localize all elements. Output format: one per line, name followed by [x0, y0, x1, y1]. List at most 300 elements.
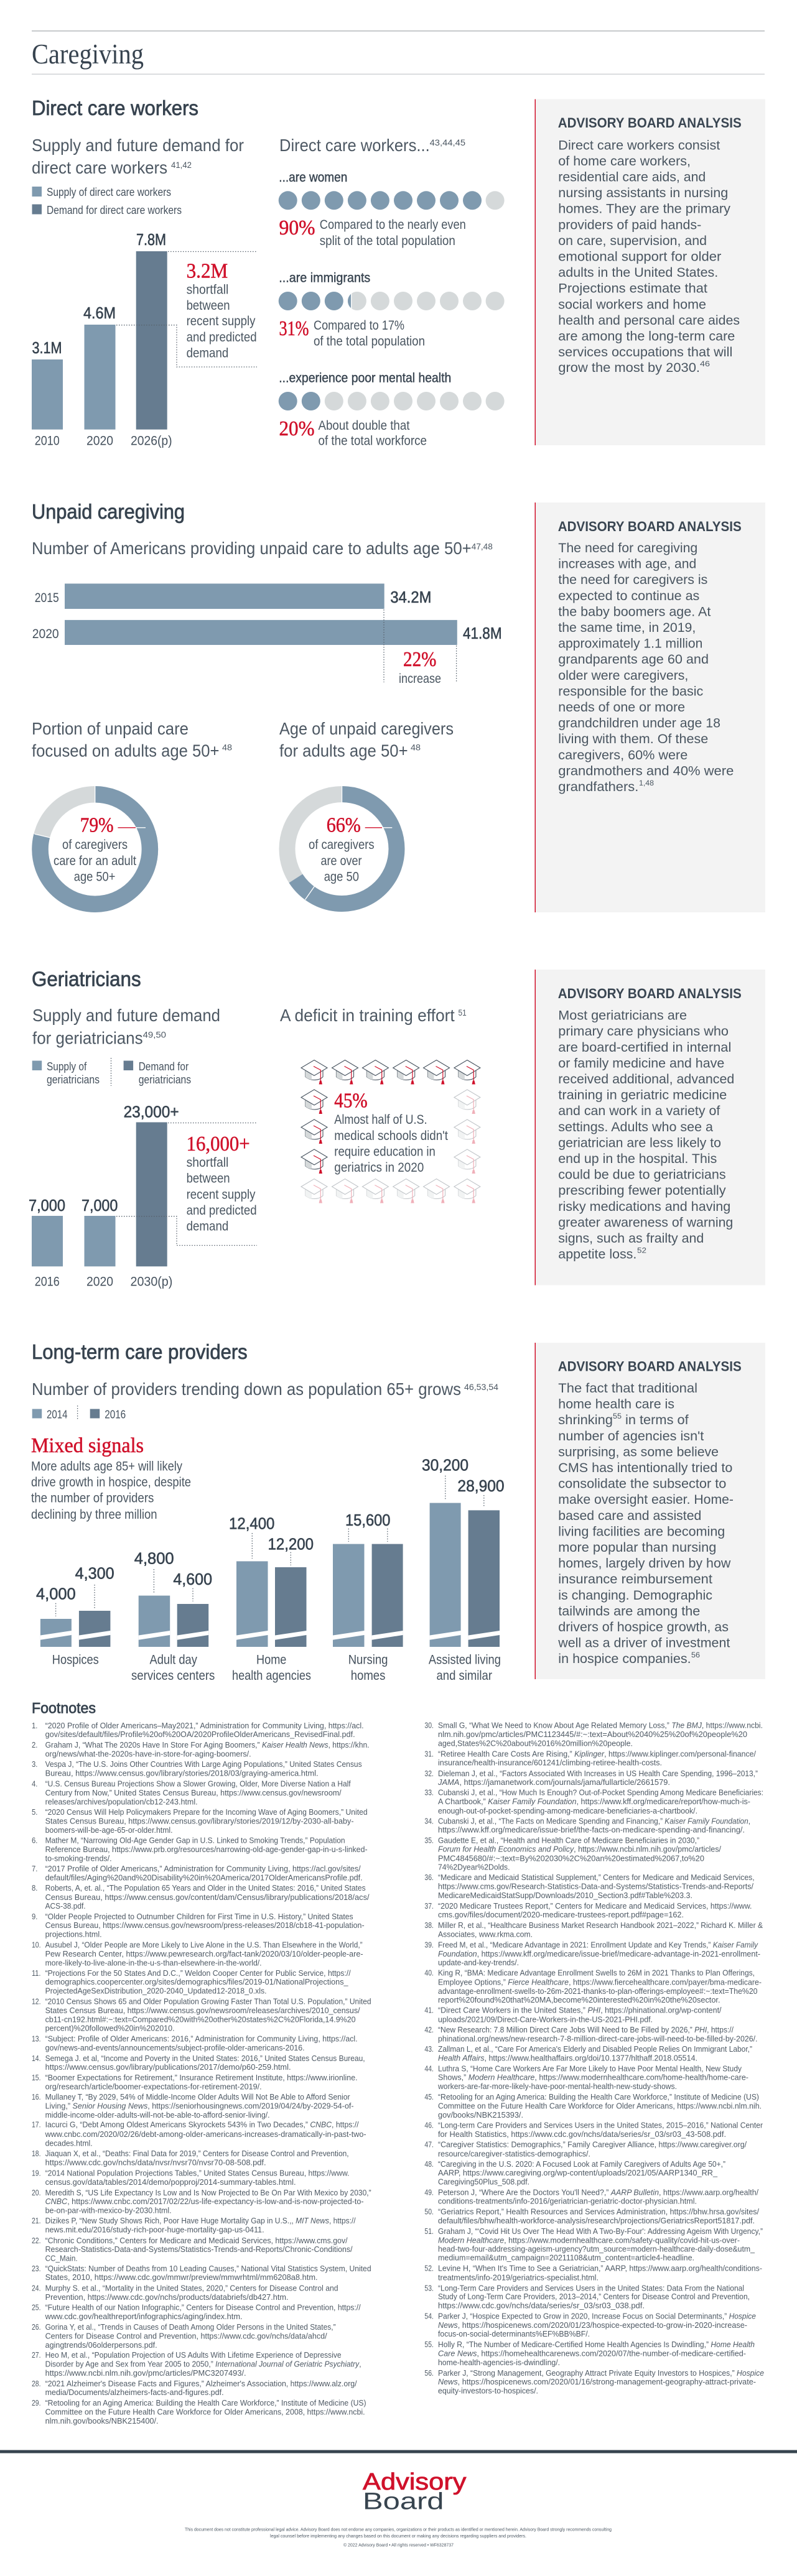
footnotes: right column 30 to 56: for Health Statistics, https://www.cdc.gov/nchs/data/series/sr_03/sr03_43-508.pdf. — [438, 2130, 726, 2139]
footnotes: left column 1 to 29: Census Bureau, https://www.census.gov/newsroom/press-releases/2018/cb18-41-population- — [45, 1921, 365, 1930]
bars: hospices: Hospices — [52, 1652, 99, 1667]
stat: are women — [279, 170, 505, 248]
bars: nursing homes — [333, 1511, 403, 1683]
footnotes: left column 1 to 29: “2014 National Population Projections Tables,” United States Census Bureau, https://www. — [45, 2169, 350, 2178]
section: direct care workers — [32, 96, 505, 448]
footnotes: right column 30 to 56: report%20found%20that%20MA,become%20interested%20in%20the%20sector. — [438, 1996, 720, 2004]
footnotes: right column 30 to 56: JAMA, https://jamanetwork.com/journals/jama/fullarticle/2661579. — [437, 1778, 670, 1787]
panel: advisory board analysis, geriatricians: or family medicine and have — [558, 1056, 724, 1070]
panel: advisory board analysis, direct care workers: on care, supervision, and — [558, 234, 707, 248]
footnotes: right column 30 to 56: Foundation, https://www.kff.org/medicare/issue-brief/medicare-advantage-in-2021-enrollment- — [438, 1950, 760, 1958]
footnotes: left column 1 to 29: www.cnbc.com/2020/02/26/debt-among-older-americans-increases-dramatically-in-past-two- — [45, 2130, 366, 2139]
stat: are women: ...are women — [279, 170, 347, 185]
footnotes: right column 30 to 56: nlm.nih.gov/pmc/articles/PMC1123445/#:~:text=About%2040%25%20of%20people%20 — [438, 1730, 747, 1739]
footnotes: left column 1 to 29: 20. — [32, 2189, 41, 2197]
panel: advisory board analysis, long-term care providers: homes, largely driven by how — [558, 1557, 731, 1571]
bar chart: unpaid caregivers 2015 vs 2020 — [32, 583, 502, 686]
footnotes: left column 1 to 29: 2. — [32, 1741, 37, 1749]
bar chart: direct care workers supply vs demand: 3.1M — [32, 338, 62, 357]
footnotes: left column 1 to 29: States, 2010, https://www.cdc.gov/mmwr/preview/mmwrhtml/mm6208a8.htm. — [45, 2273, 318, 2282]
logo: Advisory Board: Board — [363, 2489, 444, 2515]
footnotes: left column 1 to 29: 3. — [32, 1760, 37, 1769]
footnotes: right column 30 to 56: 43. — [424, 2045, 434, 2054]
legend: 2014 and 2016 — [32, 1406, 126, 1421]
chart title: supply and future demand for geriatricians — [32, 1006, 220, 1048]
callout: 3.2M shortfall: shortfall — [187, 282, 228, 297]
footnotes: right column 30 to 56: “Retiree Health Care Costs Are Rising,” Kiplinger, https://www.kiplinger.com/personal-finance/ — [438, 1749, 757, 1758]
panel: advisory board analysis, long-term care providers: well as a driver of investment — [557, 1636, 730, 1651]
callout: 3.2M shortfall: 3.2M — [187, 259, 228, 282]
footnotes: left column 1 to 29: “Older People Projected to Outnumber Children for First Time in U.S. History,” United States — [45, 1912, 353, 1921]
bar chart: geriatricians supply vs demand: 7,000 — [82, 1196, 118, 1215]
footer legal text: © 2022 Advisory Board • All rights reserved • WF6328737 — [343, 2542, 454, 2547]
footnotes: left column 1 to 29: 12. — [32, 1998, 41, 2006]
footnotes: right column 30 to 56: cms.gov/files/document/2020-medicare-trustees-report.pdf#page=162. — [438, 1911, 684, 1919]
bar chart: geriatricians supply vs demand: 23,000+ — [124, 1102, 179, 1121]
footnotes: left column 1 to 29: releases/archives/population/cb12-243.html. — [45, 1797, 198, 1806]
chart title: supply and future demand: direct care workers — [32, 158, 167, 177]
footnotes: right column 30 to 56: 56. — [424, 2369, 434, 2378]
footnotes: left column 1 to 29: Vespa J, “The U.S. Joins Other Countries With Large Aging Populations,” United States Census — [45, 1760, 362, 1769]
stat: 45 percent of medical schools: 45% — [334, 1090, 368, 1113]
footnotes: left column 1 to 29: CNBC, https://www.cnbc.com/2017/02/22/us-life-expectancy-is-low-and-is-now-projected-to- — [45, 2197, 364, 2206]
callout: mixed signals: drive growth in hospice, despite — [31, 1475, 191, 1490]
footnotes: right column 30 to 56: phinational.org/news/new-research-7-8-million-direct-care-jobs-will-need-to-be-filled-by-2026/. — [438, 2034, 758, 2043]
footnotes: left column 1 to 29: 11. — [32, 1969, 41, 1978]
panel: advisory board analysis, direct care workers: of home care workers, — [558, 154, 691, 169]
footnotes: right column 30 to 56: 31. — [424, 1749, 434, 1758]
panel: advisory board analysis, geriatricians: risky medications and having — [558, 1200, 730, 1214]
panel: advisory board analysis, unpaid caregiving: older were caregivers, — [558, 669, 688, 683]
panel: advisory board analysis, long-term care providers: The fact that traditional — [558, 1381, 697, 1396]
footnotes: right column 30 to 56: “Caregiving in the U.S. 2020: A Focused Look at Family Caregivers of Adults Age 50+,” — [438, 2160, 725, 2169]
footer legal text — [185, 2526, 612, 2547]
footnotes: left column 1 to 29: 7. — [32, 1865, 37, 1873]
footnotes: left column 1 to 29: Living,” Senior Housing News, https://seniorhousingnews.com/2019/04/24/by-2029-54-of- — [45, 2102, 354, 2111]
footnotes: right column 30 to 56: 47. — [424, 2141, 434, 2149]
panel: advisory board analysis, direct care workers: Direct care workers consist — [558, 138, 720, 152]
footnotes: left column 1 to 29: Bureau, https://www.census.gov/library/stories/2018/03/graying-america.html. — [45, 1769, 319, 1777]
footnotes: left column 1 to 29: “U.S. Census Bureau Projections Show a Slower Growing, Older, More Diverse Nation a Half — [45, 1780, 351, 1789]
panel: advisory board analysis, unpaid caregiving: increases with age, and — [558, 557, 696, 572]
panel: advisory board analysis, long-term care providers — [535, 1343, 765, 1679]
panel: advisory board analysis, direct care workers: Projections estimate that — [558, 282, 707, 296]
footnotes: left column 1 to 29: 28. — [32, 2379, 41, 2388]
panel: advisory board analysis, long-term care providers: 56 — [691, 1651, 700, 1659]
panel: advisory board analysis, geriatricians: settings. Adults who see a — [558, 1120, 713, 1134]
bars: nursing homes: Nursing — [348, 1652, 388, 1667]
panel: advisory board analysis, unpaid caregiving: approximately 1.1 million — [558, 637, 702, 651]
bars: home health agencies — [229, 1514, 314, 1683]
bars: nursing homes: homes — [351, 1669, 385, 1683]
footnotes: right column 30 to 56: resource/caregiver-statistics-demographics/. — [438, 2149, 590, 2158]
footnotes: left column 1 to 29: agingtrends/06olderpersons.pdf. — [45, 2341, 157, 2350]
panel: advisory board analysis, long-term care providers: tailwinds are among the — [558, 1604, 700, 1618]
footnotes: left column 1 to 29: States Census Bureau, https://www.census.gov/newsroom/releases/archives/2010_census/ — [45, 2006, 360, 2015]
footnotes: left column 1 to 29: “Future Health of our Nation Infographic,” Centers for Disease Control and Prevention, https:// — [45, 2304, 361, 2312]
footnotes: right column 30 to 56: Cubanski J, et al., “The Facts on Medicare Spending and Financing,” Kaiser Family Foundation, — [438, 1817, 750, 1825]
footnotes: right column 30 to 56: medium=email&utm_campaign=20211108&utm_content=article4-headline. — [438, 2254, 694, 2263]
panel: advisory board analysis, long-term care providers: home health care is — [558, 1397, 674, 1412]
callout: 3.2M shortfall — [187, 259, 257, 361]
footnotes: right column 30 to 56: focus-on-social-determinants%EF%BB%BF/. — [438, 2330, 590, 2338]
stat: 45 percent of medical schools: medical schools didn't — [334, 1129, 448, 1143]
footnotes: right column 30 to 56: insurance/health-insurance/601241/climbing-retiree-health-costs. — [438, 1759, 662, 1768]
panel: advisory board analysis, long-term care providers: insurance reimbursement — [558, 1572, 712, 1587]
footnotes: left column 1 to 29: news.mit.edu/2016/study-rich-poor-huge-mortality-gap-us-0411. — [45, 2226, 264, 2235]
donut chart: 79 percent: 79% — [80, 813, 114, 837]
footnotes: left column 1 to 29: census.gov/data/tables/2014/demo/popproj/2014-summary-tables.html. — [45, 2178, 296, 2187]
panel: advisory board analysis, geriatricians: prescribing fewer potentially — [558, 1184, 726, 1198]
panel: advisory board analysis, geriatricians: appetite loss. — [558, 1248, 636, 1262]
panel: advisory board analysis, long-term care providers: make oversight easier. Home- — [558, 1493, 734, 1507]
footnotes: right column 30 to 56: Associates, www.rkma.com. — [438, 1930, 533, 1939]
bar chart: geriatricians supply vs demand — [29, 1102, 257, 1289]
panel: advisory board analysis, geriatricians: signs, such as frailty and — [558, 1231, 704, 1246]
footnotes: left column 1 to 29: Research-Statistics-Data-and-Systems/Statistics-Trends-and-Reports/Chronic-Conditions/ — [45, 2245, 353, 2254]
callout: 3.2M shortfall: recent supply — [187, 314, 256, 328]
stat: 45 percent of medical schools: require education in — [334, 1145, 436, 1159]
footnotes: left column 1 to 29: Reference Bureau, https://www.prb.org/resources/narrowing-old-age-gender-gap-in-u-s-linked- — [45, 1845, 368, 1854]
callout: 16,000+ shortfall: 16,000+ — [187, 1133, 250, 1156]
legend: 2014 and 2016: 2014 — [47, 1409, 67, 1421]
panel: advisory board analysis, geriatricians: training in geriatric medicine — [558, 1088, 727, 1103]
chart title: portion of unpaid care: focused on adults age 50+ — [32, 741, 219, 760]
panel: advisory board analysis, long-term care providers: is changing. Demographic — [558, 1588, 712, 1603]
footnotes: left column 1 to 29: Census Bureau, https://www.census.gov/content/dam/Census/library/publications/2018/acs/ — [45, 1893, 370, 1902]
bars: assisted living and similar: and similar — [437, 1669, 492, 1683]
bar chart: unpaid caregivers 2015 vs 2020: 41.8M — [463, 624, 502, 642]
bar chart: direct care workers supply vs demand: 7.8M — [136, 230, 166, 249]
footnotes: right column 30 to 56: https://www.cms.gov/Research-Statistics-Data-and-Systems/Statistics-Trends-and-Reports/ — [438, 1882, 754, 1891]
footnotes: left column 1 to 29: 25. — [32, 2304, 41, 2312]
panel: advisory board analysis, long-term care providers: in hospice companies. — [558, 1652, 691, 1666]
panel: advisory board analysis, direct care workers: social workers and home — [558, 297, 706, 312]
footnotes: right column 30 to 56: 33. — [424, 1789, 434, 1797]
footnotes: left column 1 to 29: 13. — [32, 2035, 41, 2044]
stat: are women: 90% — [279, 216, 315, 239]
heading: footnotes: Footnotes — [32, 1700, 96, 1717]
footnotes: left column 1 to 29: https://www.census.gov/library/publications/2017/demo/p60-259.html. — [45, 2063, 291, 2072]
callout: mixed signals — [31, 1434, 191, 1522]
bars: hospices — [36, 1564, 114, 1667]
legend: 2014 and 2016: 2016 — [105, 1409, 126, 1421]
panel: advisory board analysis, direct care workers: providers of paid hands- — [558, 218, 701, 232]
footnotes: left column 1 to 29: 24. — [32, 2284, 41, 2292]
panel: advisory board analysis, geriatricians: end up in the hospital. This — [558, 1152, 717, 1166]
footnotes: left column 1 to 29: https://www.cdc.gov/nchs/data/nvsr/nvsr70/nvsr70-08-508.pdf. — [45, 2159, 266, 2167]
panel: advisory board analysis, long-term care providers: CMS has intentionally tried to — [558, 1461, 732, 1475]
footnotes: left column 1 to 29: 22. — [32, 2236, 41, 2245]
panel: advisory board analysis, direct care workers: grow the most by 2030. — [558, 361, 700, 375]
stat: are women: split of the total population — [320, 234, 455, 248]
chart title: a deficit in training effort: 51 — [458, 1008, 467, 1017]
panel: advisory board analysis, long-term care providers: in terms of — [625, 1413, 689, 1427]
footnotes: right column 30 to 56: Peterson J, “Where Are the Doctors You'll Need?,” AARP Bulletin, https://www.aarp.org/health/ — [438, 2188, 759, 2197]
footnotes: left column 1 to 29: 9. — [32, 1912, 37, 1921]
footnotes: left column 1 to 29: projections.html. — [45, 1930, 102, 1939]
footnotes: right column 30 to 56: home-health-agencies-is-dwindling/. — [438, 2358, 560, 2367]
bar chart: geriatricians supply vs demand: 2016 — [35, 1275, 60, 1289]
stat: 45 percent of medical schools: Almost half of U.S. — [334, 1113, 427, 1127]
panel: advisory board analysis, unpaid caregiving: 1,48 — [639, 779, 654, 787]
bars: hospices: 4,000 — [36, 1584, 76, 1603]
footnotes: right column 30 to 56: 39. — [424, 1941, 434, 1950]
panel: advisory board analysis, unpaid caregiving: expected to continue as — [558, 589, 699, 603]
footnotes: right column 30 to 56: “New Research: 7.8 Million Direct Care Jobs Will Need to Be Filled by 2026,” PHI, https:// — [438, 2026, 734, 2034]
bar chart: providers by type, 2014 vs 2016 — [36, 1455, 505, 1683]
footnotes: left column 1 to 29: ProjectedAgeSexDistribution_2020-2040_Updated12-2018_0.xls. — [45, 1987, 267, 1996]
heading: unpaid caregiving: Unpaid caregiving — [32, 500, 185, 523]
donut chart: 79 percent: age 50+ — [74, 869, 115, 884]
footnotes: right column 30 to 56: “Geriatrics Report,” Health Resources and Services Administration, https://bhw.hrsa.gov/sites/ — [438, 2208, 760, 2217]
bars: assisted living and similar: 28,900 — [457, 1476, 505, 1495]
footnotes: left column 1 to 29: 10. — [32, 1940, 41, 1949]
donut chart: 66 percent: 66% — [327, 813, 361, 837]
footnotes: left column 1 to 29: Dizikes P, “New Study Shows Rich, Poor Have Huge Mortality Gap in U.S.,, MIT News, https:// — [45, 2217, 356, 2225]
callout: 16,000+ shortfall: and predicted — [187, 1203, 257, 1218]
panel: advisory board analysis, unpaid caregiving: the same time, in 2019, — [558, 621, 696, 635]
panel: advisory board analysis, long-term care providers: consolidate the subsector to — [558, 1477, 726, 1491]
footnotes: right column 30 to 56: update-and-key-trends/. — [438, 1958, 519, 1967]
panel: advisory board analysis, long-term care providers: number of agencies isn't — [558, 1429, 704, 1443]
bars: nursing homes: 15,600 — [345, 1511, 391, 1529]
footnotes: left column 1 to 29: 5. — [32, 1808, 37, 1817]
donut chart: 66 percent — [287, 786, 397, 904]
header: page title: Caregiving — [32, 39, 144, 70]
callout: mixed signals: the number of providers — [31, 1491, 154, 1506]
footnotes: left column 1 to 29: Pew Research Center, https://www.pewresearch.org/fact-tank/2020/03/10/older-people-are- — [45, 1950, 363, 1958]
footnotes: right column 30 to 56: aged,States%2C%20about%2016%20million%20people. — [438, 1739, 633, 1748]
donut chart: 66 percent: are over — [321, 854, 362, 868]
stat: are immigrants: Compared to 17% — [314, 318, 404, 333]
footnotes: left column 1 to 29: middle-income-older-adults-will-not-be-able-to-afford-senior-living/. — [45, 2111, 270, 2120]
footnotes: left column 1 to 29: Meredith S, “US Life Expectancy Is Low and Is Now Projected to Be On Par With Mexico by 2030,” — [45, 2189, 371, 2197]
footnotes: left column 1 to 29: demographics.coopercenter.org/sites/demographics/files/2019-01/NationalProjections_ — [45, 1978, 349, 1986]
footnotes: right column 30 to 56: Parker J, “Hospice Expected to Grow in 2020, Increase Focus on Social Determinants,” Hospice — [438, 2312, 756, 2320]
footnotes: right column 30 to 56: 50. — [424, 2208, 434, 2217]
footnotes: left column 1 to 29: States Census Bureau, https://www.census.gov/library/stories/2019/12/by-2030-all-baby- — [45, 1817, 354, 1825]
panel: advisory board analysis, geriatricians: could be due to geriatricians — [558, 1168, 726, 1182]
footnotes: right column 30 to 56: News, https://hospicenews.com/2020/01/23/hospice-expected-to-grow-in-2020-increase- — [438, 2321, 747, 2330]
footnotes: right column 30 to 56: “Long-Term Care Providers and Services Users in the United States: Data From the National — [438, 2284, 744, 2292]
panel: advisory board analysis, direct care workers: 46 — [700, 359, 710, 368]
bars: adult day services centers: 4,600 — [173, 1570, 212, 1588]
footnotes: left column 1 to 29: 17. — [32, 2121, 41, 2129]
footnotes: right column 30 to 56: https://www.kff.org/medicare/issue-brief/the-facts-on-medicare-spending-and-financing/. — [438, 1826, 745, 1835]
legend: geriatrician supply and demand: Supply of — [47, 1060, 87, 1073]
footnotes: right column 30 to 56: “Retooling for an Aging America: Building the Health Care Workforce,” Institute of Medicine (US) — [438, 2093, 759, 2101]
stat: are immigrants: ...are immigrants — [279, 271, 370, 285]
bars: adult day services centers: Adult day — [149, 1652, 197, 1667]
legend: geriatrician supply and demand: geriatricians — [139, 1073, 191, 1086]
panel: advisory board analysis, long-term care providers: drivers of hospice growth, as — [558, 1620, 729, 1634]
panel: advisory board analysis, geriatricians: ADVISORY BOARD ANALYSIS — [558, 986, 742, 1001]
bars: adult day services centers: services centers — [131, 1669, 215, 1683]
panel: advisory board analysis, unpaid caregiving: ADVISORY BOARD ANALYSIS — [558, 519, 742, 534]
chart title: age of unpaid caregivers: Age of unpaid caregivers — [279, 719, 454, 738]
chart title: supply and future demand: 41,42 — [171, 160, 192, 170]
footnotes: left column 1 to 29 — [32, 1721, 371, 2425]
panel: advisory board analysis, geriatricians: primary care physicians who — [558, 1024, 729, 1039]
bars: hospices: 4,300 — [75, 1564, 114, 1583]
bar chart: unpaid caregivers 2015 vs 2020: 34.2M — [390, 588, 431, 606]
footnotes: right column 30 to 56: Caregiving50Plus_508.pdf. — [438, 2177, 529, 2186]
footnotes: left column 1 to 29: media/Documents/alzheimers-facts-and-figures.pdf. — [45, 2388, 224, 2397]
panel: advisory board analysis, unpaid caregiving: The need for caregiving — [558, 541, 697, 555]
panel: advisory board analysis, direct care workers: ADVISORY BOARD ANALYSIS — [558, 115, 742, 131]
footnotes: right column 30 to 56: “2020 Medicare Trustees Report,” Centers for Medicare and Medicaid Services, https://www. — [438, 1902, 752, 1911]
footnotes: left column 1 to 29: gov/sites/default/files/Profile%20of%20OA/2020ProfileOlderAmericans_RevisedFinal.pdf. — [45, 1730, 355, 1739]
panel: advisory board analysis, long-term care providers: 55 — [613, 1412, 622, 1420]
footnotes: left column 1 to 29: “Chronic Conditions,” Centers for Medicare and Medicaid Services, https://www.cms.gov/ — [45, 2236, 348, 2245]
footnotes: left column 1 to 29: Heo M, et al., “Population Projection of US Adults With Lifetime Experience of Depressive — [45, 2351, 342, 2360]
legend: geriatrician supply and demand: geriatricians — [47, 1073, 100, 1086]
bars: adult day services centers — [131, 1549, 215, 1683]
footnotes: right column 30 to 56: uploads/2021/09/Direct-Care-Workers-in-the-US-2021-PHI.pdf. — [438, 2015, 653, 2024]
panel: advisory board analysis, unpaid caregiving — [535, 503, 765, 912]
footnotes: right column 30 to 56: Levine H, “When It's Time to See a Geriatrician,” AARP, https://www.aarp.org/health/conditions- — [438, 2264, 762, 2273]
panel: advisory board analysis, geriatricians — [535, 970, 765, 1285]
footer rule — [0, 2450, 797, 2453]
stat: experience poor mental health: About double that — [319, 419, 410, 433]
footnotes: right column 30 to 56: 32. — [424, 1769, 434, 1778]
section: long-term care providers — [31, 1340, 505, 1683]
panel: advisory board analysis, unpaid caregiving: grandchildren under age 18 — [558, 716, 720, 731]
footnotes: left column 1 to 29: decades.html. — [45, 2139, 93, 2148]
panel: advisory board analysis, unpaid caregiving: grandfathers. — [558, 780, 638, 794]
footnotes: right column 30 to 56: 49. — [424, 2188, 434, 2197]
footnotes: right column 30 to 56: 54. — [424, 2312, 434, 2320]
footnotes: right column 30 to 56: Small G, “What We Need to Know About Age Related Memory Loss,” The BMJ, https://www.ncbi. — [438, 1721, 763, 1730]
footnotes: left column 1 to 29: ACS-38.pdf. — [45, 1902, 86, 1911]
panel: advisory board analysis, unpaid caregiving: caregivers, 60% were — [558, 748, 687, 762]
footnotes: left column 1 to 29: “Retooling for an Aging America: Building the Health Care Workforce,” Institute of Medicine (US) — [45, 2399, 366, 2407]
footnotes: left column 1 to 29: 27. — [32, 2351, 41, 2360]
footnotes: left column 1 to 29: Ausubel J, “Older People are More Likely to Live Alone in the U.S. Than Elsewhere in the World,” — [45, 1940, 363, 1949]
bar chart: geriatricians supply vs demand: 2020 — [86, 1275, 113, 1289]
footnotes: right column 30 to 56: PMC4845680/#:~:text=By%202030%2C%20an%20estimated%2067,to%20 — [438, 1854, 704, 1863]
panel: advisory board analysis, unpaid caregiving: the need for caregivers is — [558, 573, 707, 587]
panel: advisory board analysis, unpaid caregiving: responsible for the basic — [558, 684, 703, 698]
footnotes: right column 30 to 56: treatments/info-2019/geriatrics-specialist.html. — [438, 2273, 599, 2282]
footnotes: left column 1 to 29: Committee on the Future Health Care Workforce for Older Americans, 2008, https://www.ncbi. — [45, 2408, 365, 2417]
section: unpaid caregiving — [32, 500, 502, 904]
chart title: direct care workers demographics: Direct care workers... — [279, 136, 430, 155]
footnotes: right column 30 to 56: 55. — [424, 2340, 434, 2349]
panel: advisory board analysis, direct care workers: adults in the United States. — [558, 266, 718, 280]
footnotes: left column 1 to 29: Prevention, https://www.cdc.gov/nchs/products/databriefs/db427.htm. — [45, 2293, 289, 2302]
footnotes: right column 30 to 56: advantage-enrollment-swells-to-26m-2021-thanks-to-plan-offerings-employee#:~:text=The%20 — [438, 1987, 758, 1996]
footnotes: left column 1 to 29: 1. — [32, 1721, 37, 1730]
footnotes: left column 1 to 29: 4. — [32, 1780, 37, 1789]
chart title: number of providers: Number of providers trending down as population 65+ grows — [32, 1379, 461, 1399]
footnotes: right column 30 to 56: 34. — [424, 1817, 434, 1825]
footnotes: right column 30 to 56: Cubanski J, et al., “How Much Is Enough? Out-of-Pocket Spending Among Medicare Beneficiaries: — [438, 1789, 763, 1797]
footnotes: right column 30 to 56: https://www.cdc.gov/nchs/data/series/sr_03/sr03_038.pdf. — [438, 2301, 645, 2310]
chart title: supply and future demand for geriatricians: Supply and future demand — [32, 1006, 220, 1025]
footnotes: left column 1 to 29: Mather M, “Narrowing Old-Age Gender Gap in U.S. Linked to Smoking Trends,” Population — [45, 1836, 345, 1845]
bar chart: geriatricians supply vs demand: 7,000 — [29, 1196, 65, 1215]
footnotes: right column 30 to 56: 36. — [424, 1873, 434, 1882]
heading: long-term care providers: Long-term care providers — [32, 1340, 248, 1363]
heading: direct care workers: Direct care workers — [32, 96, 198, 119]
footnotes: left column 1 to 29: 19. — [32, 2169, 41, 2178]
stat: are women: Compared to the nearly even — [320, 218, 466, 232]
callout: mixed signals: declining by three million — [31, 1508, 157, 1522]
stat: 45 percent of medical schools — [334, 1090, 448, 1175]
chart title: number of Americans providing unpaid care: 47,48 — [472, 541, 493, 551]
footnotes: right column 30 to 56: Employee Options,” Fierce Healthcare, https://www.fiercehealthcare.com/payer/bma-medicare- — [438, 1978, 762, 1987]
icon grid: graduation caps, 45 percent — [301, 1060, 480, 1203]
footnotes: left column 1 to 29: org/research/article/boomer-expectations-for-retirement-2019/. — [45, 2083, 262, 2092]
chart title: number of providers: 46,53,54 — [464, 1382, 498, 1392]
footnotes: right column 30 to 56: “Direct Care Workers in the United States,” PHI, https://phinational.org/wp-content/ — [438, 2006, 722, 2015]
footnotes: right column 30 to 56: Forum for Health Economics and Policy, https://www.ncbi.nlm.nih.gov/pmc/articles/ — [438, 1845, 722, 1854]
footnotes: right column 30 to 56: Study of Long-Term Care Providers, 2013–2014,” Centers for Disease Control and Prevention, — [438, 2292, 750, 2301]
donut chart: 79 percent: care for an adult — [54, 854, 136, 868]
footnotes: left column 1 to 29: be-on-par-with-mexico-by-2030.html. — [45, 2207, 172, 2215]
panel: advisory board analysis, long-term care providers: more popular than nursing — [558, 1541, 716, 1555]
stat: experience poor mental health: of the total workforce — [319, 434, 427, 448]
panel: advisory board analysis, unpaid caregiving: grandmothers and 40% were — [558, 764, 734, 778]
chart title: portion of unpaid care — [32, 719, 232, 760]
panel: advisory board analysis, long-term care providers: living facilities are becoming — [558, 1524, 725, 1539]
callout: 16,000+ shortfall: shortfall — [187, 1156, 228, 1170]
legend: supply and demand: Demand for direct care workers — [47, 204, 182, 216]
footnotes: left column 1 to 29: 29. — [32, 2399, 41, 2407]
panel: advisory board analysis, geriatricians: are board-certified in internal — [558, 1040, 731, 1055]
bars: home health agencies: health agencies — [232, 1669, 311, 1683]
footnotes: right column 30 to 56: Zallman L, et al., “Care For America's Elderly and Disabled People Relies On Immigrant Labor,” — [438, 2045, 752, 2054]
footnotes: left column 1 to 29: 26. — [32, 2323, 41, 2332]
footnotes: left column 1 to 29: 16. — [32, 2093, 41, 2101]
chart title: supply and future demand: Supply and future demand for — [32, 136, 244, 155]
footnotes: right column 30 to 56: 52. — [424, 2264, 434, 2273]
chart title: age of unpaid caregivers: 48 — [411, 743, 421, 753]
stat: 45 percent of medical schools: geriatrics in 2020 — [334, 1161, 424, 1175]
panel: advisory board analysis, geriatricians: received additional, advanced — [558, 1072, 734, 1086]
footnotes: right column 30 to 56: 48. — [424, 2160, 434, 2169]
chart title: age of unpaid caregivers: for adults age 50+ — [279, 741, 408, 760]
footnotes: right column 30 to 56: Dieleman J, et al., “Factors Associated With Increases in US Health Care Spending, 1996–2013,” — [438, 1769, 758, 1778]
panel: advisory board analysis, unpaid caregiving: needs of one or more — [558, 700, 685, 715]
footnotes: right column 30 to 56: 51. — [424, 2227, 434, 2236]
chart title: number of Americans providing unpaid care: Number of Americans providing unpaid care to adults age 50+ — [32, 539, 472, 558]
footnotes: left column 1 to 29: www.cdc.gov/healthreport/infographics/aging/index.htm. — [45, 2312, 243, 2321]
footnotes: right column 30 to 56: 40. — [424, 1969, 434, 1978]
legend: supply and demand: Supply of direct care workers — [47, 186, 171, 198]
footnotes: left column 1 to 29: boomers-will-be-age-65-or-older.html. — [45, 1826, 173, 1835]
footnotes: right column 30 to 56: A Chartbook,” Kaiser Family Foundation, https://www.kff.org/medicare/report/how-much-is- — [438, 1797, 750, 1806]
footnotes: left column 1 to 29: 21. — [32, 2217, 41, 2225]
footnotes: left column 1 to 29: to-smoking-trends/. — [45, 1854, 112, 1863]
bar chart: geriatricians supply vs demand: 2030(p) — [131, 1275, 172, 1289]
footnotes: left column 1 to 29: “Subject: Profile of Older Americans: 2016,” Administration for Community Living, https://acl. — [45, 2035, 358, 2044]
legend: geriatrician supply and demand — [32, 1058, 191, 1086]
stat: are immigrants: of the total population — [314, 334, 425, 348]
panel: advisory board analysis, direct care workers: services occupations that will — [558, 345, 732, 359]
panel: advisory board analysis, unpaid caregiving: the baby boomers age. At — [558, 605, 711, 619]
footnotes: right column 30 to 56: Parker J, “Strong Management, Geography Attract Private Equity Investors to Hospices,” Hospice — [438, 2369, 764, 2378]
footnotes: right column 30 to 56: 37. — [424, 1902, 434, 1911]
bar chart: direct care workers supply vs demand: 2010 — [35, 434, 60, 448]
panel: advisory board analysis, direct care workers: homes. They are the primary — [558, 202, 731, 216]
footnotes: right column 30 to 56: enough-out-of-pocket-spending-among-medicare-beneficiaries-a-chartbook/. — [438, 1807, 697, 1815]
footnotes: left column 1 to 29: Mullaney T, “By 2029, 54% of Middle-Income Older Adults Will Not Be Able to Afford Senior — [45, 2093, 350, 2101]
footnotes: right column 30 to 56: 53. — [424, 2284, 434, 2292]
footnotes: right column 30 to 56: 41. — [424, 2006, 434, 2015]
